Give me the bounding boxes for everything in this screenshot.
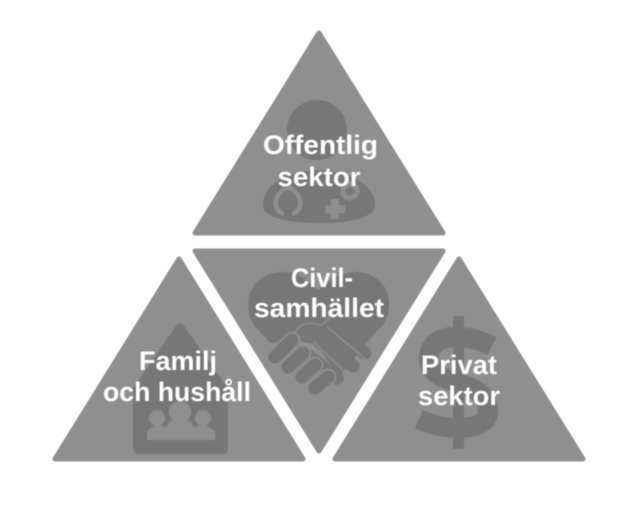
heading: Familj och hushåll: Familj <box>139 346 217 376</box>
heading: Privat sektor: Privat <box>421 350 497 380</box>
triangle background: right <box>335 259 583 459</box>
heading: Civilsamhället: samhället <box>254 293 384 323</box>
panel: Civilsamhället <box>195 251 443 451</box>
heading: Familj och hushåll <box>103 346 251 407</box>
heading: Offentlig sektor: Offentlig <box>263 130 378 160</box>
panel: Offentlig sektor <box>195 33 443 233</box>
heading: Privat sektor: sektor <box>418 381 500 411</box>
icon: dollar sign <box>419 316 492 449</box>
icon: handshake heart <box>248 272 389 388</box>
heading: Offentlig sektor <box>263 130 378 192</box>
heading: Offentlig sektor: sektor <box>278 162 361 192</box>
triangle background: middle <box>195 251 443 451</box>
heading: Privat sektor <box>418 350 500 411</box>
heading: Civilsamhället <box>254 263 384 323</box>
triangle background: top <box>195 33 443 233</box>
triangle background: left <box>55 259 303 459</box>
panel: Familj och hushåll <box>55 259 303 459</box>
panel: Privat sektor <box>335 259 583 459</box>
heading: Civilsamhället: Civil- <box>291 263 353 293</box>
heading: Familj och hushåll: och hushåll <box>103 377 251 407</box>
icon: house with family <box>133 323 228 454</box>
icon: doctor <box>263 100 375 223</box>
